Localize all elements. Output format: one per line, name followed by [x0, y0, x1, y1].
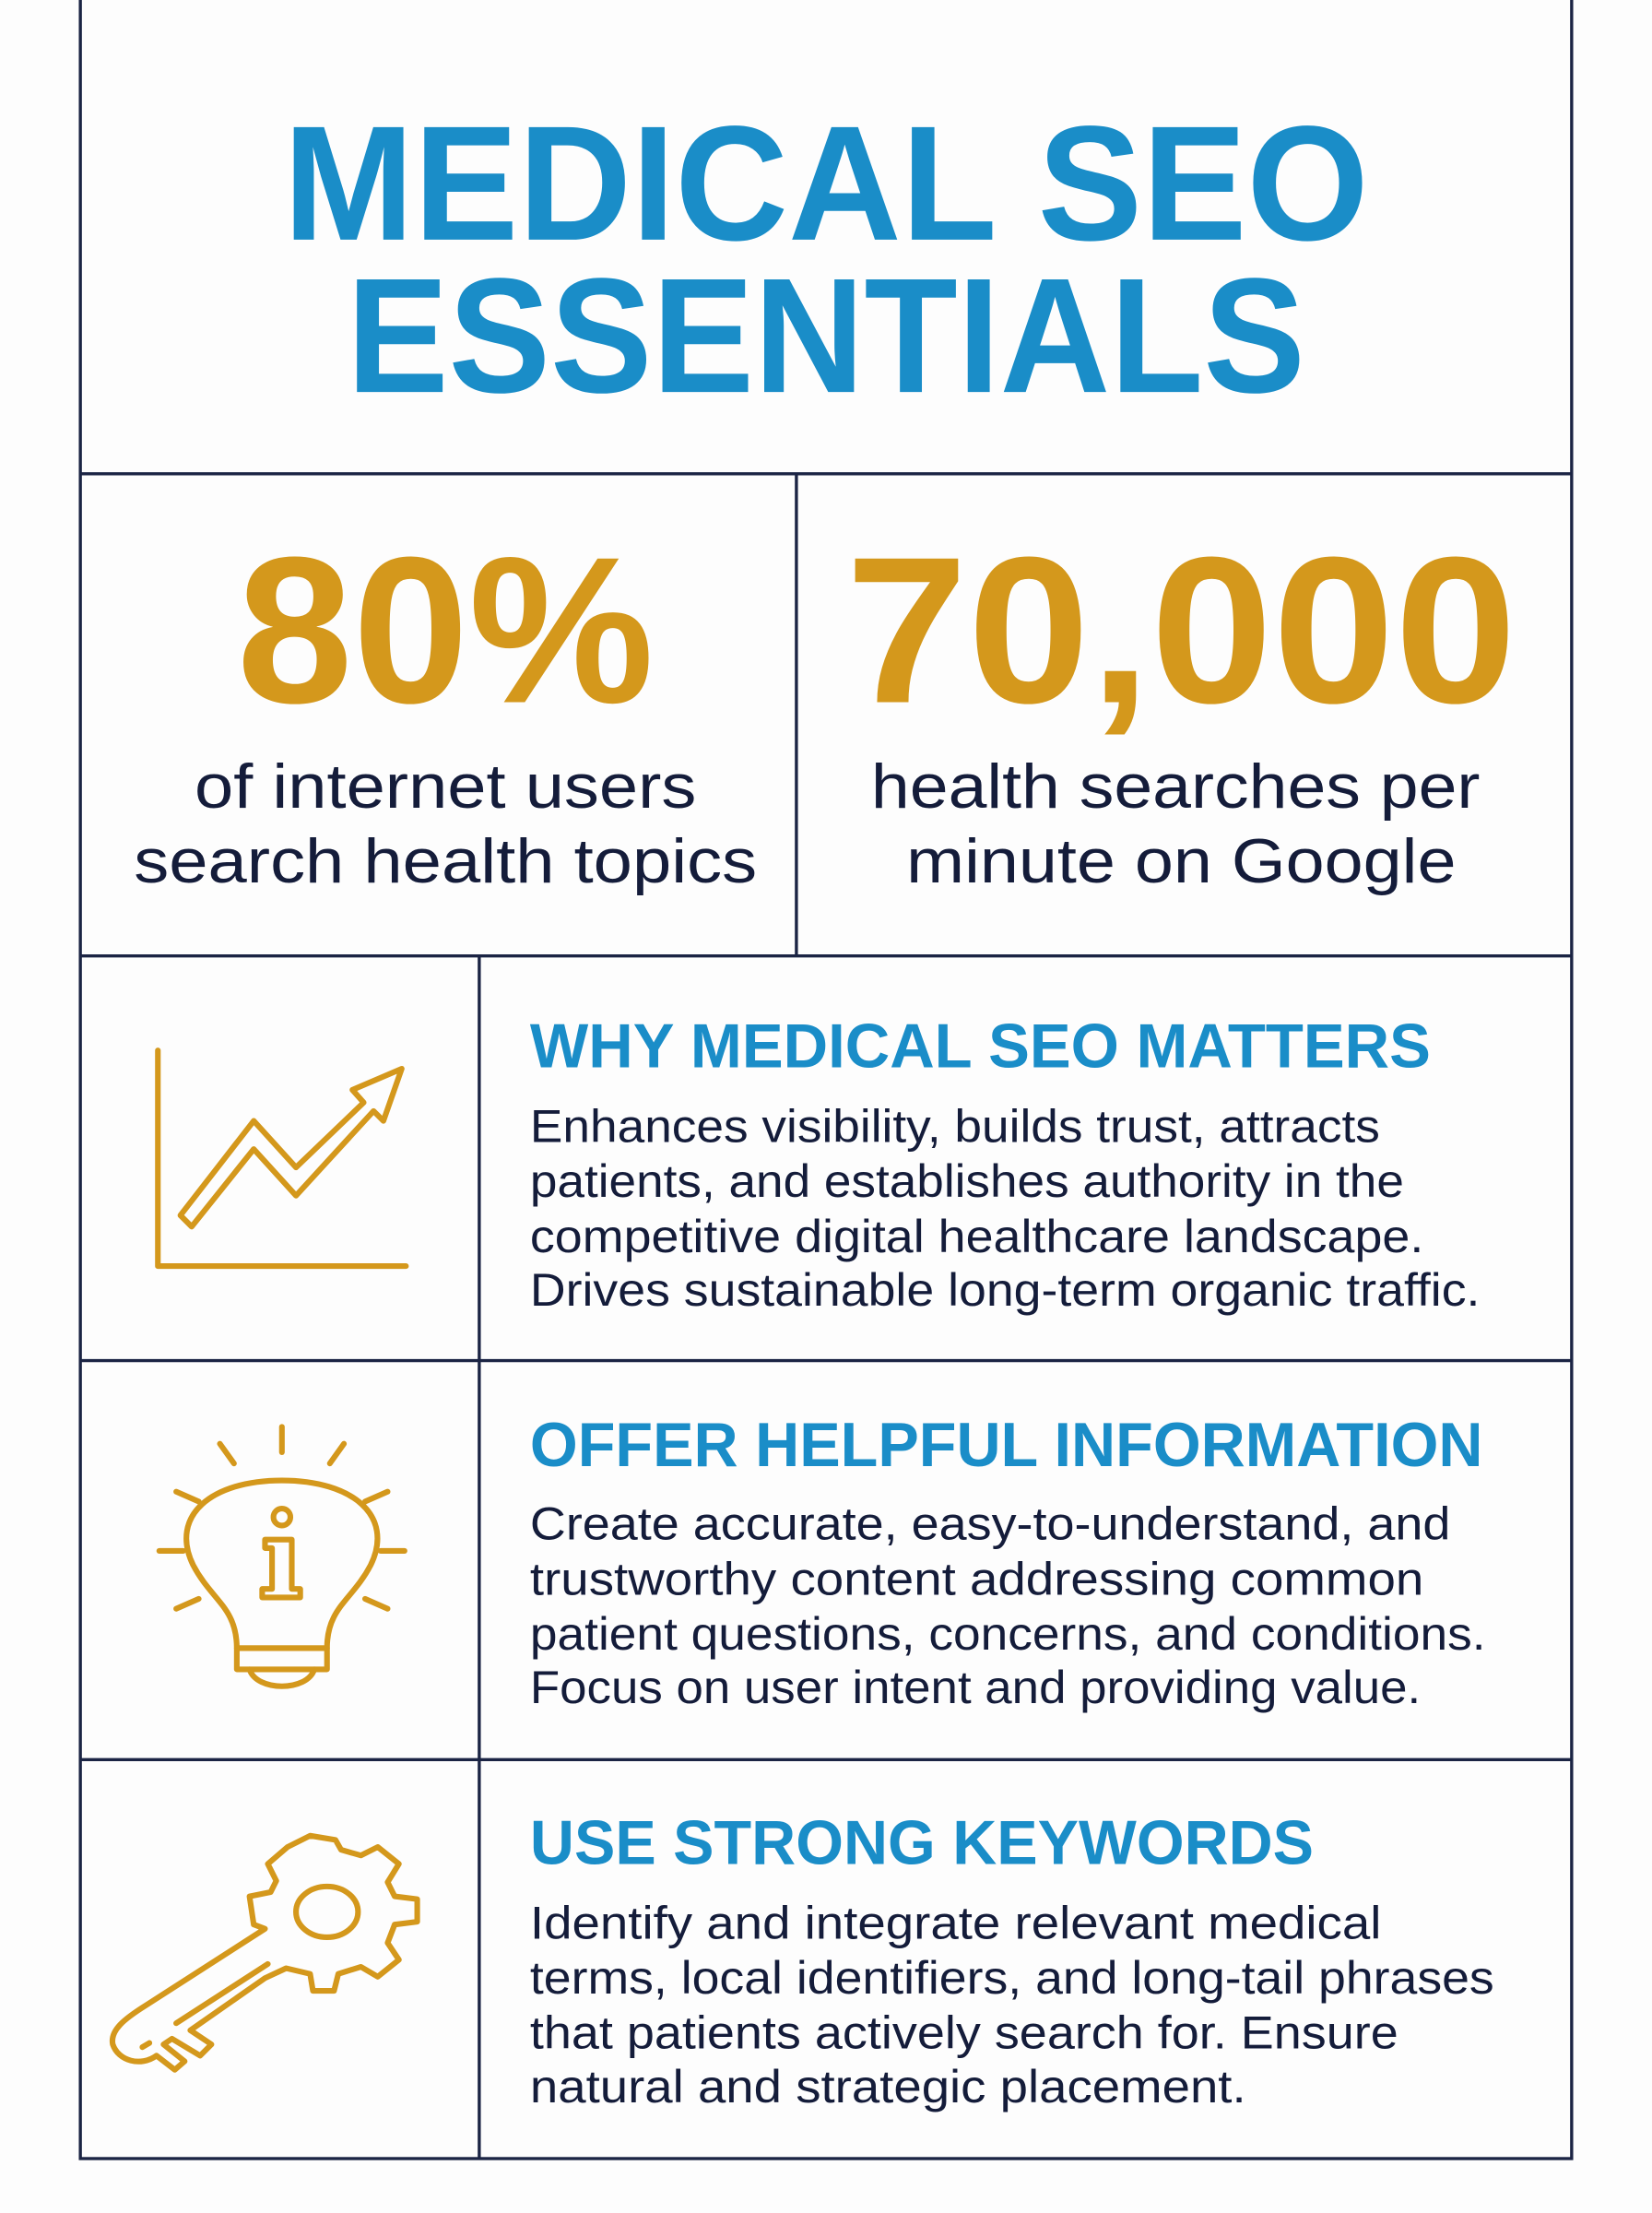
title: MEDICAL SEO — [283, 91, 1369, 275]
icon: lightbulb — [159, 1426, 405, 1686]
stat: 70,000: 70,000 — [845, 513, 1516, 746]
section: use strong keywords: natural and strategic placement. — [530, 2060, 1246, 2112]
title — [283, 91, 1369, 427]
section: use strong keywords: terms, local identifiers, and long-tail phrases — [530, 1951, 1494, 2004]
section: offer helpful information — [530, 1411, 1486, 1713]
stat: 70,000: health searches per — [871, 752, 1480, 822]
stat: 80%: 80% — [237, 513, 654, 746]
section: use strong keywords — [530, 1808, 1494, 2112]
title: ESSENTIALS — [347, 243, 1305, 427]
section: why medical seo matters: patients, and establishes authority in the — [530, 1154, 1404, 1207]
section: use strong keywords: that patients actively search for. Ensure — [530, 2006, 1398, 2059]
stat: 80%: of internet users — [195, 752, 696, 822]
stat: 80%: search health topics — [134, 827, 757, 896]
section: why medical seo matters — [530, 1012, 1480, 1316]
section: why medical seo matters: competitive digital healthcare landscape. — [530, 1210, 1423, 1262]
section: offer helpful information: Focus on user intent and providing value. — [530, 1661, 1421, 1713]
icon: growth chart — [158, 1050, 406, 1266]
section: offer helpful information: patient questions, concerns, and conditions. — [530, 1607, 1486, 1660]
section: why medical seo matters: Drives sustainable long-term organic traffic. — [530, 1263, 1480, 1316]
stat: 70,000 — [845, 513, 1516, 896]
section: why medical seo matters: Enhances visibility, builds trust, attracts — [530, 1100, 1380, 1153]
stat: 80% — [134, 513, 757, 896]
icon: key with gear — [112, 1836, 418, 2070]
stat: 70,000: minute on Google — [906, 827, 1456, 896]
section: why medical seo matters: WHY MEDICAL SEO MATTERS — [530, 1012, 1431, 1081]
section: offer helpful information: Create accurate, easy-to-understand, and — [530, 1497, 1450, 1550]
section: use strong keywords: Identify and integrate relevant medical — [530, 1896, 1381, 1948]
section: offer helpful information: OFFER HELPFUL INFORMATION — [530, 1411, 1483, 1480]
section: use strong keywords: USE STRONG KEYWORDS — [530, 1808, 1314, 1877]
section: offer helpful information: trustworthy content addressing common — [530, 1552, 1423, 1604]
